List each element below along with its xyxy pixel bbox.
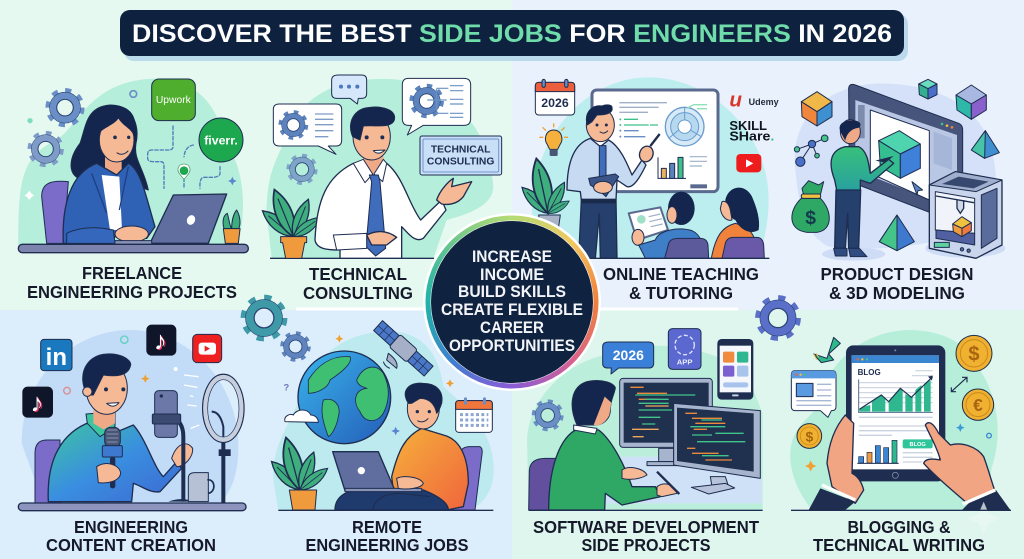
label (820, 264, 974, 303)
illustration: consultant presenting (258, 75, 502, 259)
illustration: remote worker and globe: ? (283, 383, 289, 393)
icon: YouTube (193, 334, 222, 363)
desk (18, 244, 248, 253)
icon: upwork: Upwork (156, 95, 192, 106)
label (533, 517, 759, 555)
label: ONLINE TEACHING (603, 264, 759, 284)
label: PRODUCT DESIGN (820, 264, 974, 284)
benefits text: BUILD SKILLS (458, 283, 566, 301)
gear speech bubble right (402, 78, 471, 135)
icon: TikTok left: ♪ (32, 389, 45, 419)
icon: TikTok top: ♪ (154, 326, 167, 356)
icon: app tile: APP (677, 358, 693, 367)
icon: light bulb (539, 123, 568, 156)
logo: Skillshare (729, 119, 774, 144)
label (46, 517, 216, 555)
icon: 3D printer (929, 172, 1002, 258)
label: REMOTE (352, 517, 422, 537)
icon: money bag (792, 181, 829, 232)
icon: 2026 bubble: 2026 (613, 347, 644, 363)
icon: molecule (794, 135, 828, 166)
consulting sign: TECHNICAL (431, 145, 490, 156)
title banner (120, 10, 908, 61)
label: & 3D MODELING (829, 283, 965, 303)
icon: upwork (152, 79, 195, 121)
benefits text: INCREASE (472, 248, 552, 266)
laptop (333, 452, 422, 492)
panel: software development side projects (527, 329, 763, 555)
panel: technical consulting (258, 75, 502, 303)
label: & TUTORING (629, 283, 733, 303)
illustration: remote worker and globe (267, 319, 494, 511)
coins (956, 335, 992, 371)
gear speech bubble left (273, 104, 342, 154)
icon: money bag: $ (805, 208, 816, 229)
consulting sign: CONSULTING (427, 156, 494, 167)
desk (18, 503, 246, 511)
icon: TikTok left (22, 387, 53, 419)
benefits text: OPPORTUNITIES (449, 337, 575, 355)
label (603, 264, 759, 303)
panel: product design and 3D modeling (792, 79, 1005, 303)
coins: $ (968, 344, 980, 366)
label (27, 263, 237, 302)
icon: LinkedIn (41, 339, 72, 371)
icon: fiverr (199, 118, 243, 162)
panel: freelance engineering projects (18, 79, 248, 302)
illustration: teacher with whiteboard (518, 77, 779, 259)
illustration: freelancer at laptop (18, 79, 248, 253)
label: ENGINEERING PROJECTS (27, 282, 237, 302)
icon: app tile (668, 329, 701, 369)
label: CONSULTING (303, 283, 413, 303)
benefits text: CREATE FLEXIBLE (441, 301, 583, 319)
label: ENGINEERING (74, 517, 188, 537)
icon: LinkedIn: in (46, 344, 67, 371)
tablet: BLOG (909, 442, 926, 448)
microphone (102, 427, 122, 488)
illustration: tablet with blog chart: $ (805, 428, 813, 444)
icon: phone (717, 339, 753, 400)
logo: Udemy (729, 89, 779, 112)
illustration: creator with microphone and ring light (18, 325, 246, 511)
illustration: designer with monitor and 3D printer (792, 79, 1005, 261)
illustration: developer at two monitors (527, 329, 763, 511)
panel: online teaching and tutoring (518, 77, 779, 303)
left hand (809, 415, 864, 510)
label: ENGINEERING JOBS (306, 535, 468, 555)
icon: fiverr: fiverr. (204, 133, 238, 147)
illustration: tablet with blog chart (790, 330, 1011, 535)
front monitor (674, 403, 760, 494)
illustration: tablet with blog chart: € (973, 395, 983, 415)
chat bubble (332, 75, 367, 104)
benefits text (441, 248, 583, 355)
logo: Udemy: Udemy (749, 97, 779, 107)
icon: 2026 calendar (535, 79, 575, 115)
globe (298, 351, 391, 444)
logo: Skillshare: SKILL (729, 119, 767, 133)
icon: TikTok left: ♪ (30, 388, 43, 418)
benefits text: CAREER (480, 319, 544, 337)
calendar (456, 397, 492, 432)
logo: Udemy: u (729, 89, 742, 112)
label: SIDE PROJECTS (582, 535, 710, 555)
title banner: DISCOVER THE BEST SIDE JOBS FOR ENGINEERS IN 2026 (132, 20, 892, 48)
right hand (924, 423, 1010, 510)
panel: remote engineering jobs (267, 319, 494, 555)
cube icons (801, 92, 832, 126)
web page bubble (791, 371, 836, 417)
label: FREELANCE (82, 263, 182, 283)
label: TECHNICAL WRITING (813, 535, 985, 555)
icon: 2026 calendar: 2026 (541, 96, 569, 110)
consulting sign (420, 136, 502, 175)
panel: blogging and technical writing (790, 330, 1011, 555)
label (306, 517, 468, 555)
label: BLOGGING & (848, 517, 951, 537)
back monitor (620, 378, 712, 466)
central circle: benefits (423, 213, 601, 391)
label: CONTENT CREATION (46, 535, 216, 555)
label: SOFTWARE DEVELOPMENT (533, 517, 759, 537)
tablet: BLOG (858, 368, 881, 377)
ring light (203, 374, 244, 503)
cloud (285, 410, 318, 422)
label (813, 517, 985, 555)
logo: YouTube (736, 154, 761, 172)
panel: engineering content creation (18, 325, 246, 555)
label: TECHNICAL (309, 264, 407, 284)
benefits text: INCOME (480, 266, 544, 284)
icon: TikTok top: ♪ (155, 327, 168, 357)
tablet (846, 345, 945, 481)
icon: gears between panels (243, 297, 798, 360)
icon: 2026 bubble (603, 342, 654, 374)
icon: TikTok top (146, 325, 176, 357)
logo: Skillshare: SHare. (729, 130, 774, 144)
satellite (372, 319, 434, 377)
label (303, 264, 413, 303)
